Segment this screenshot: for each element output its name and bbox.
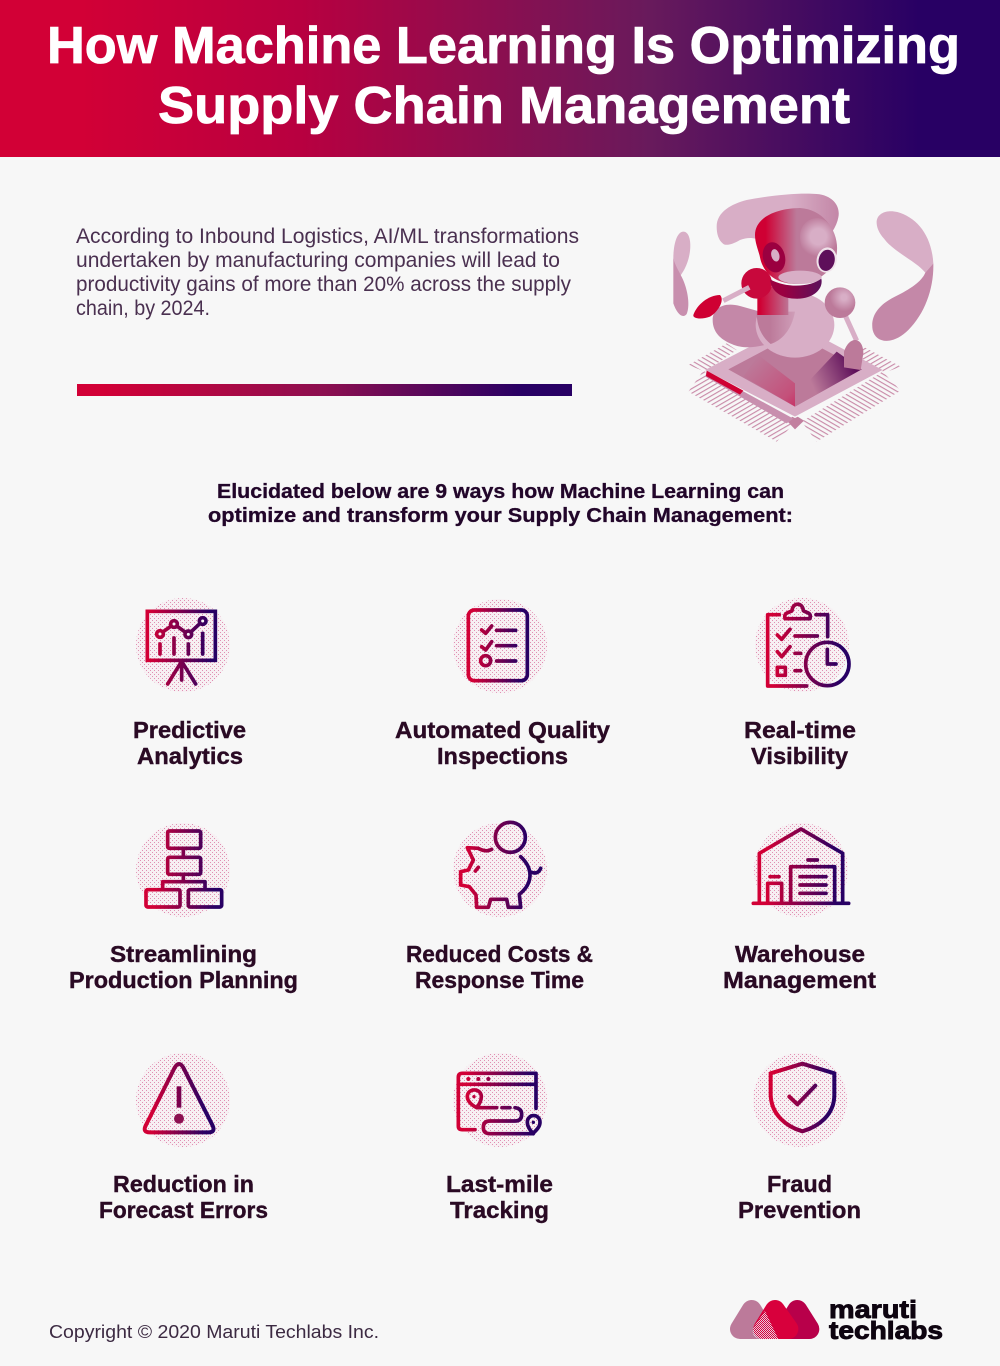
label: [744, 717, 856, 769]
robot right arm: [825, 287, 863, 370]
gradient divider bar: [77, 384, 572, 396]
label: [446, 1171, 553, 1223]
label: Response Time: [415, 967, 584, 993]
label: Predictive: [133, 717, 246, 743]
icon: flow chart: [146, 831, 222, 907]
intro text: productivity gains of more than 20% across the supply: [76, 273, 571, 296]
copyright: Copyright © 2020 Maruti Techlabs Inc.: [49, 1322, 379, 1342]
item: streamlining production planning: [69, 823, 298, 993]
label: [99, 1171, 268, 1223]
ribbon: left: [673, 232, 690, 316]
dotted backdrop: [753, 1053, 847, 1147]
dotted backdrop: [453, 823, 547, 917]
logo mark: [740, 1310, 809, 1339]
intro text: chain, by 2024.: [76, 297, 210, 320]
label: Reduced Costs &: [406, 941, 593, 967]
robot right eye: [814, 246, 839, 274]
intro text: [76, 225, 579, 320]
label: [69, 941, 298, 993]
item: last-mile tracking: [446, 1053, 553, 1223]
dotted backdrop: [755, 598, 849, 692]
ribbon: top: [717, 194, 839, 247]
robot collar: [770, 279, 822, 299]
item: fraud prevention: [738, 1053, 861, 1223]
label: Warehouse: [735, 941, 865, 967]
title: Supply Chain Management: [158, 77, 850, 135]
label: [738, 1171, 861, 1223]
logo wordmark: techlabs: [829, 1317, 943, 1345]
ribbon: right: [872, 211, 933, 341]
title: [47, 17, 960, 135]
chip pins: [688, 343, 901, 442]
icon: piggy bank: [461, 822, 541, 907]
item: predictive analytics: [133, 598, 246, 769]
dotted backdrop: [136, 598, 230, 692]
robot left wing: [713, 305, 773, 347]
icon: shield with check: [771, 1064, 834, 1131]
item: reduced costs and response time: [406, 822, 593, 993]
header banner: [0, 0, 1000, 157]
logo: [740, 1296, 943, 1345]
title: How Machine Learning Is Optimizing: [47, 17, 960, 75]
label: Reduction in: [113, 1171, 254, 1197]
item: real-time visibility: [744, 598, 856, 769]
subheading: Elucidated below are 9 ways how Machine Learning can: [217, 481, 784, 503]
item: automated quality inspections: [395, 599, 610, 769]
dotted backdrop: [754, 823, 848, 917]
icon: browser with route: [458, 1073, 540, 1134]
label: Analytics: [137, 743, 243, 769]
chip base: [705, 323, 883, 429]
robot left arm: [693, 287, 749, 318]
logo wordmark: [829, 1296, 943, 1345]
icon: warning triangle: [145, 1064, 214, 1132]
dotted backdrop: [453, 599, 547, 693]
label: Forecast Errors: [99, 1197, 268, 1223]
label: Tracking: [450, 1197, 549, 1223]
label: Management: [723, 967, 876, 993]
icon: presentation chart: [147, 611, 215, 684]
label: Inspections: [437, 743, 568, 769]
icon: warehouse: [753, 829, 849, 903]
label: [133, 717, 246, 769]
logo wordmark: maruti: [829, 1296, 917, 1324]
label: Prevention: [738, 1197, 861, 1223]
robot red shoulder: [741, 268, 788, 315]
subheading: optimize and transform your Supply Chain Management:: [208, 505, 793, 527]
icon: checklist: [468, 610, 527, 681]
robot body: [756, 292, 834, 358]
dotted backdrop: [136, 823, 230, 917]
label: [395, 717, 610, 769]
item: reduction in forecast errors: [99, 1053, 268, 1223]
label: Visibility: [751, 743, 848, 769]
dotted backdrop: [136, 1053, 230, 1147]
label: Streamlining: [110, 941, 257, 967]
dotted backdrop: [453, 1053, 547, 1147]
item: warehouse management: [723, 823, 876, 993]
label: Automated Quality: [395, 717, 610, 743]
robot on chip illustration: [673, 194, 933, 442]
intro text: According to Inbound Logistics, AI/ML transformations: [76, 225, 579, 248]
label: Fraud: [767, 1171, 832, 1197]
label: Production Planning: [69, 967, 298, 993]
label: Last-mile: [446, 1171, 553, 1197]
label: [723, 941, 876, 993]
intro text: undertaken by manufacturing companies will lead to: [76, 249, 560, 272]
subheading: [208, 481, 793, 527]
robot left eye: [759, 240, 789, 275]
label: [406, 941, 593, 993]
icon: clipboard and clock: [768, 604, 849, 686]
robot head: [755, 208, 839, 284]
label: Real-time: [744, 717, 856, 743]
